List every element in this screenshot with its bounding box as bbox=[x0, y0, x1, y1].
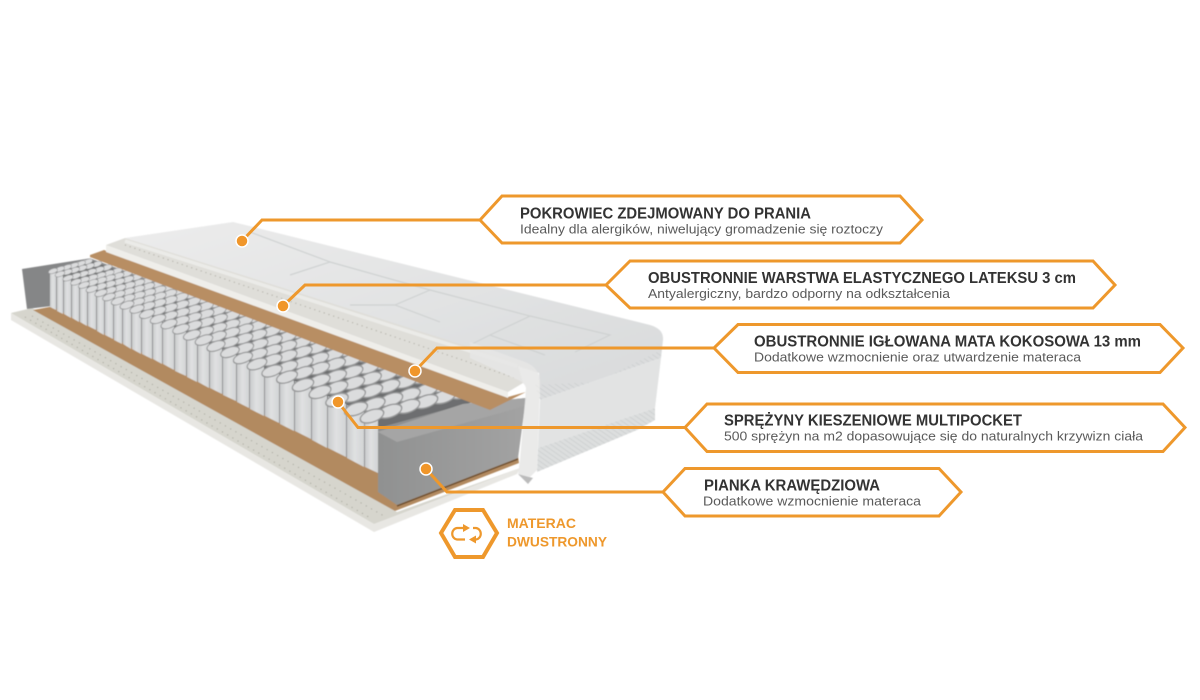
callout: pocket springs: SPRĘŻYNY KIESZENIOWE MULTIPOCKET bbox=[724, 413, 1022, 430]
mattress body with cover bbox=[125, 222, 663, 484]
callout: cover: POKROWIEC ZDEJMOWANY DO PRANIA bbox=[520, 206, 811, 222]
translucent cover end bbox=[470, 342, 540, 477]
front edge foam block bbox=[378, 398, 526, 506]
pocket springs bbox=[48, 258, 480, 473]
callout: edge foam bbox=[420, 463, 961, 516]
callout: coconut mat: OBUSTRONNIE IGŁOWANA MATA KOKOSOWA 13 mm bbox=[754, 334, 1141, 351]
mattress illustration bbox=[11, 222, 663, 532]
callout: pocket springs bbox=[332, 396, 1185, 452]
callout: latex bbox=[277, 261, 1115, 312]
upper latex layer bbox=[106, 238, 523, 398]
lower coconut mat bbox=[33, 305, 519, 511]
badge: double-sided mattress: DWUSTRONNY bbox=[507, 534, 608, 550]
callout: latex: OBUSTRONNIE WARSTWA ELASTYCZNEGO LATEKSU 3 cm bbox=[648, 270, 1076, 287]
callout: latex: Antyalergiczny, bardzo odporny na odkształcenia bbox=[648, 286, 951, 301]
callout: edge foam: PIANKA KRAWĘDZIOWA bbox=[704, 478, 880, 495]
badge: double-sided mattress: MATERAC bbox=[507, 515, 576, 531]
badge: double-sided mattress bbox=[441, 510, 608, 557]
callout: cover: Idealny dla alergików, niwelujący gromadzenie się roztoczy bbox=[520, 222, 884, 236]
lower latex layer bbox=[11, 308, 520, 532]
rear edge foam bbox=[22, 258, 92, 309]
upper coconut mat bbox=[90, 250, 526, 410]
callout: coconut mat: Dodatkowe wzmocnienie oraz utwardzenie materaca bbox=[754, 350, 1082, 365]
callout: edge foam: Dodatkowe wzmocnienie materaca bbox=[703, 494, 922, 509]
callout: coconut mat bbox=[409, 324, 1183, 377]
callout: cover bbox=[236, 196, 922, 247]
callout: pocket springs: 500 sprężyn na m2 dopasowujące się do naturalnych krzywizn ciała bbox=[724, 429, 1144, 444]
